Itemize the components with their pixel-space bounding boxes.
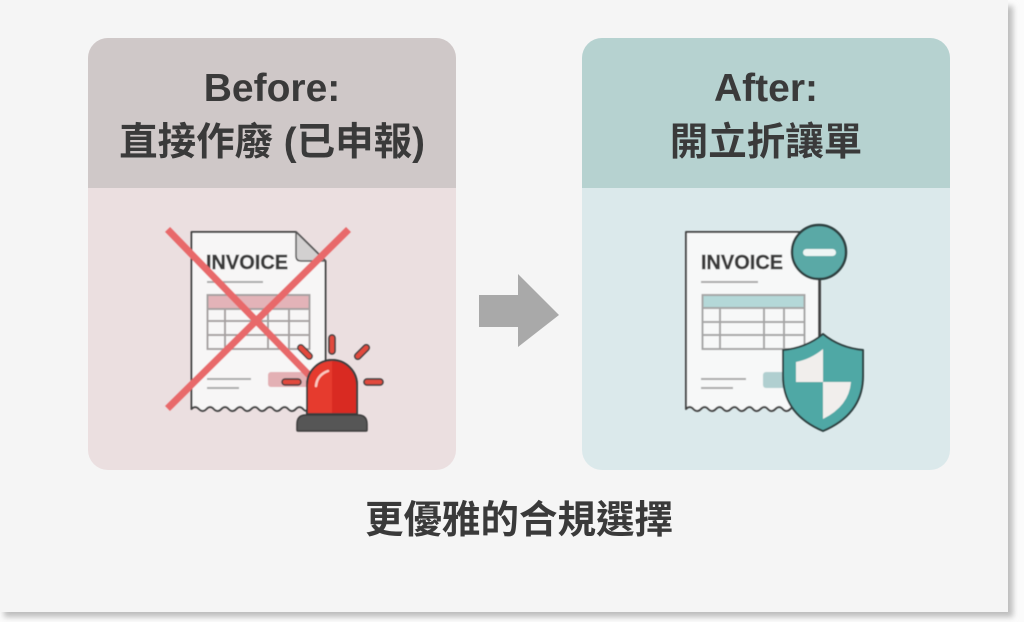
- invoice label: INVOICE: [206, 252, 288, 274]
- heading: before: 直接作廢 (已申報): [119, 121, 425, 164]
- invoice label: INVOICE: [701, 252, 783, 274]
- alarm light: [282, 335, 383, 431]
- red cross: [170, 232, 346, 406]
- invoice table: [207, 295, 310, 349]
- panel: after: [582, 38, 950, 470]
- invoice document: [686, 232, 820, 411]
- shield: [783, 334, 863, 431]
- caption: 更優雅的合規選擇: [365, 499, 673, 542]
- heading: before: Before:: [204, 67, 340, 110]
- panel: before: [88, 38, 456, 470]
- panel body: after: [582, 188, 950, 470]
- panel body: before: [88, 188, 456, 470]
- panel header: after: [582, 38, 950, 188]
- minus badge: [792, 225, 846, 345]
- heading: before: [119, 67, 425, 164]
- invoice document: [192, 232, 326, 411]
- arrow: [479, 274, 559, 347]
- icon: voided invoice with alarm: [170, 232, 383, 431]
- panel header: before: [88, 38, 456, 188]
- heading: after: 開立折讓單: [670, 121, 862, 164]
- heading: after: [670, 67, 862, 164]
- icon: credit note invoice with shield: [686, 225, 863, 431]
- heading: after: After:: [714, 67, 818, 110]
- invoice table: [702, 295, 805, 349]
